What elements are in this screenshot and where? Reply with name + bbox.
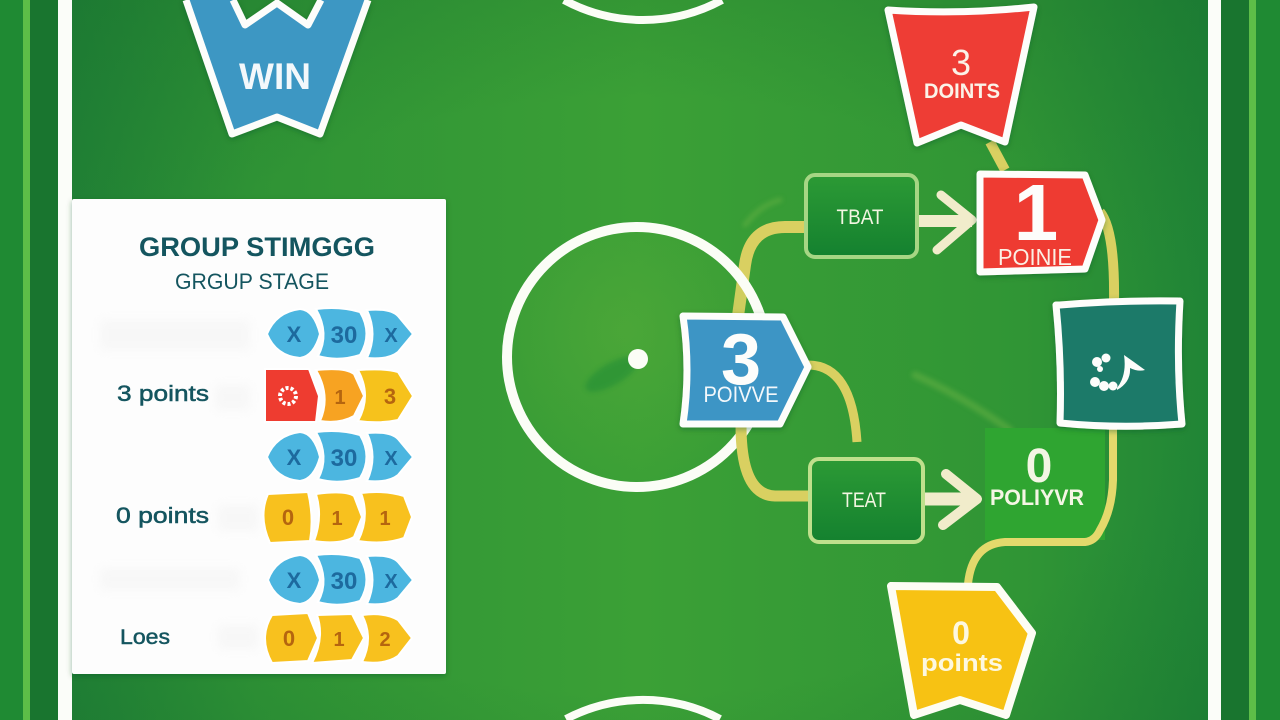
card: 1 point: 1 [1014, 168, 1058, 257]
arrow: bottom box to 0 points [925, 474, 977, 525]
badge row 1: X [384, 325, 398, 347]
badge row 6 [265, 613, 412, 663]
top penalty arc [564, 0, 722, 20]
badge row 3: X [287, 445, 302, 470]
field streaks [745, 200, 1010, 430]
banner: 0 points [891, 586, 1032, 715]
badge row 3: 30 [331, 445, 357, 472]
card: 3 points: 3 [721, 320, 761, 400]
banner number: 0 [952, 615, 970, 651]
row smudges [100, 320, 258, 649]
banner: 3 points [888, 7, 1034, 143]
banner number: 3 [951, 42, 971, 83]
badge row 1: 30 [331, 322, 357, 349]
team box: bottom [810, 459, 923, 542]
panel subtitle: GRGUP STAGE [175, 269, 329, 294]
card: 1 point: POINIE [998, 244, 1072, 270]
card: teal icon [1056, 301, 1182, 426]
badge row 3 [267, 431, 413, 482]
badge row 4: 0 [282, 505, 294, 530]
panel title: GROUP STIMGGG [139, 232, 375, 262]
badge row 1 [267, 308, 413, 359]
panel: group stage table [72, 199, 446, 674]
banner label: points [921, 650, 1003, 677]
badge row 5: 30 [331, 568, 357, 595]
badge row 5: X [384, 571, 398, 593]
bottom penalty arc [566, 700, 720, 719]
badge row 5: X [287, 568, 302, 593]
badge row 4 [263, 492, 412, 543]
right sideline stripes [1208, 0, 1280, 720]
row label: 0 points: 0 points [116, 503, 209, 528]
team box: top [806, 175, 917, 257]
connector: 3 points to top box [738, 227, 806, 316]
badge row 1: X [287, 322, 302, 347]
arrow: top box to 1 point [919, 195, 972, 250]
connector paths [741, 142, 1114, 496]
centre circle [507, 227, 767, 487]
badge row 3: X [384, 448, 398, 470]
card: 1 point [980, 168, 1102, 272]
badge row 6: 0 [283, 626, 295, 651]
badge row 4: 1 [331, 508, 343, 530]
card: 0 points: POLIYVR [990, 485, 1084, 510]
card: 3 points [683, 316, 808, 424]
left sideline stripes [0, 0, 72, 720]
card: 0 points [968, 428, 1113, 584]
badge row 4: 1 [379, 508, 391, 530]
badge row 2 [265, 369, 413, 422]
card: 3 points: POIVVE [704, 382, 778, 407]
banner label: WIN: WIN [239, 56, 311, 97]
badge row 6: 1 [333, 629, 345, 651]
banner: WIN [186, 0, 368, 134]
badge row 5 [268, 554, 413, 605]
team box: top: TBAT [836, 206, 884, 229]
badge row 6: 2 [379, 629, 391, 651]
badge row 2: 1 [334, 387, 346, 409]
icon: squiggle [1090, 354, 1145, 391]
team box: bottom: TEAT [842, 489, 886, 512]
card: 0 points: 0 [1026, 440, 1052, 493]
banner label: DOINTS [924, 80, 1000, 103]
row label: Loes: Loes [120, 626, 170, 649]
badge row 2: 3 [384, 384, 396, 409]
row label: 3 points: 3 points [117, 381, 209, 406]
